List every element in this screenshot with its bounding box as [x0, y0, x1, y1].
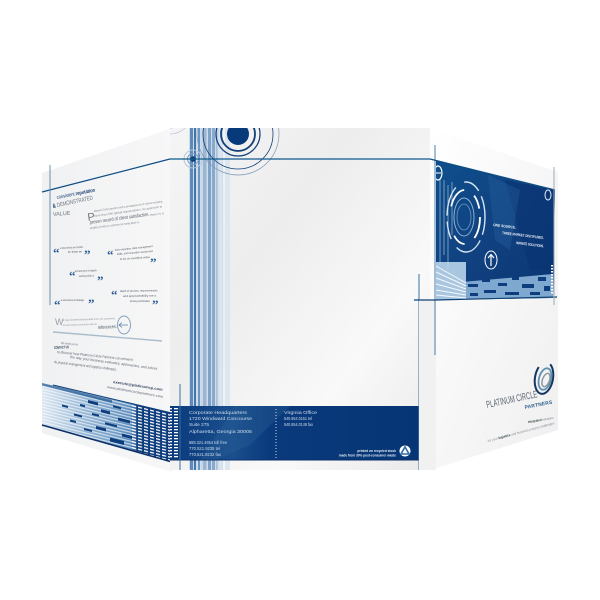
dotted divider: [275, 409, 277, 458]
contact us block: We invite you to: [61, 341, 78, 347]
panel: right cover: [414, 128, 558, 470]
vertical blue stripes: [189, 128, 230, 470]
virginia office: 540.854.0149 fax: [284, 422, 313, 428]
tagline: ONE SOURCE.: [493, 223, 516, 230]
headquarters address: Suite 275: [189, 422, 209, 428]
testimonial quotes: “: [111, 287, 118, 302]
testimonial quotes: ”: [84, 247, 90, 262]
testimonial quotes: depth of services, responsiveness,: [120, 288, 158, 293]
tagline: [493, 223, 544, 248]
tagline: THREE MARKET DISCIPLINES.: [502, 231, 544, 240]
heading: consistent reputation: [52, 188, 96, 218]
headquarters address: 888.321.4654 toll free: [189, 440, 227, 446]
testimonial quotes: a robust service we complete: [60, 245, 83, 250]
folder mockup: [42, 128, 558, 472]
testimonial quotes: ”: [88, 296, 94, 311]
headquarters address: Corporate Headquarters: [189, 410, 248, 416]
contact us block: [54, 341, 164, 399]
logo: Platinum Circle Partners: [485, 361, 556, 443]
virginia office: Virginia Office: [284, 410, 317, 416]
panel: center spread: [170, 128, 430, 470]
testimonial quotes: “: [54, 297, 61, 312]
contact us block: the way your business evaluates, approaches, and solves: [70, 355, 158, 371]
references callout: W: [55, 317, 64, 327]
intro paragraph: [87, 199, 165, 230]
icon: right arrow circle: [434, 166, 442, 180]
testimonial quotes: and everyone is happier: [75, 268, 97, 273]
icon: up arrow circle: [485, 251, 497, 269]
contact us block: www.platinumcirclepartners.com: [107, 385, 164, 399]
testimonial quotes: skills, and innovation and proved: [117, 249, 153, 256]
recycled stock note: [339, 449, 396, 458]
references callout: and are happy to provide you with our: [63, 322, 97, 327]
left guide lines: [42, 159, 170, 305]
heading: consistent reputation: VALUE: [53, 211, 71, 218]
recycled stock note: made from 30% post-consumer waste: [339, 454, 396, 458]
headquarters address: Alpharetta, Georgia 30005: [189, 429, 252, 435]
panel: left flap: [42, 128, 172, 472]
testimonial quotes: a useful source of knowledge: [61, 298, 84, 302]
testimonial quotes: “: [107, 247, 114, 262]
testimonial quotes: working with us: [79, 273, 95, 278]
testimonial quotes: “: [53, 245, 60, 260]
logo swirl: [532, 361, 556, 395]
headquarters address: [189, 410, 252, 458]
logo: Platinum Circle Partners: PLATINUM CIRCLE: [485, 389, 539, 411]
testimonial quotes: ”: [150, 255, 156, 270]
right guide lines: [414, 145, 557, 355]
testimonial quotes: ”: [152, 297, 158, 312]
center top rule: [170, 159, 436, 160]
testimonial quotes: to be an excellent value: [120, 255, 151, 261]
contact us block: execute@platinumcp.com: [113, 380, 163, 392]
headquarters address: 1720 Windward Concourse: [189, 416, 252, 422]
intro paragraph: P: [87, 211, 96, 224]
circuit image strip: [42, 378, 172, 463]
contact us block: to discover how Platinum Circle Partners can reinvent: [57, 350, 133, 362]
contact us block: its physical management and logistics challenges.: [54, 360, 117, 372]
virginia office: 540.854.0151 tel: [284, 416, 312, 422]
testimonial quotes: for those we: [68, 249, 83, 254]
testimonial quotes: their expertise, data management: [115, 244, 153, 252]
contact us block: CONTACT US: [54, 345, 69, 350]
logo: Platinum Circle Partners: integrated solutions: [528, 416, 554, 424]
heading: consistent reputation: consistent reputation: [56, 188, 96, 201]
logo: Platinum Circle Partners: PARTNERS: [524, 400, 554, 411]
intro paragraph: latinum Circle partners with a prestigious list of clients including: [94, 199, 163, 213]
intro paragraph: Here is a: [150, 211, 165, 217]
cover image: [434, 160, 555, 300]
icon: small dial: [545, 190, 551, 200]
circuit mosaic: [436, 262, 553, 300]
recycled stock note: printed on recycled stock: [357, 449, 396, 453]
icon: recycle: [400, 446, 410, 456]
headquarters address: 770.521.9232 fax: [189, 452, 221, 458]
testimonial quotes: “: [69, 268, 76, 283]
concentric ring graphic: [447, 182, 485, 252]
tagline: INFINITE SOLUTIONS.: [516, 241, 544, 248]
concentric circle graphic: [170, 128, 280, 176]
virginia office: [284, 410, 317, 428]
testimonial quotes: winning combination: [130, 299, 150, 303]
headquarters address: 770.521.9235 tel: [189, 446, 220, 452]
intro paragraph: more than 500 global organizations. Its approach to: [94, 204, 163, 218]
testimonial quotes: ”: [97, 273, 104, 288]
intro paragraph: proven record of client satisfaction.: [89, 212, 150, 226]
logo: Platinum Circle Partners: for your logistics and business process challenges: [487, 421, 555, 443]
heading: consistent reputation: & DEMONSTRATED: [52, 195, 94, 210]
testimonial quotes: [53, 244, 158, 312]
references callout: references.: [98, 324, 117, 331]
references callout: [53, 316, 162, 341]
center guide lines: [180, 274, 419, 470]
references callout: e have inserted testimonials from our customers: [63, 316, 116, 322]
intro paragraph: sampling of what our customers are saying about us:: [90, 220, 140, 230]
testimonial quotes: and approachability are a: [123, 293, 157, 298]
contact band: [170, 406, 428, 460]
